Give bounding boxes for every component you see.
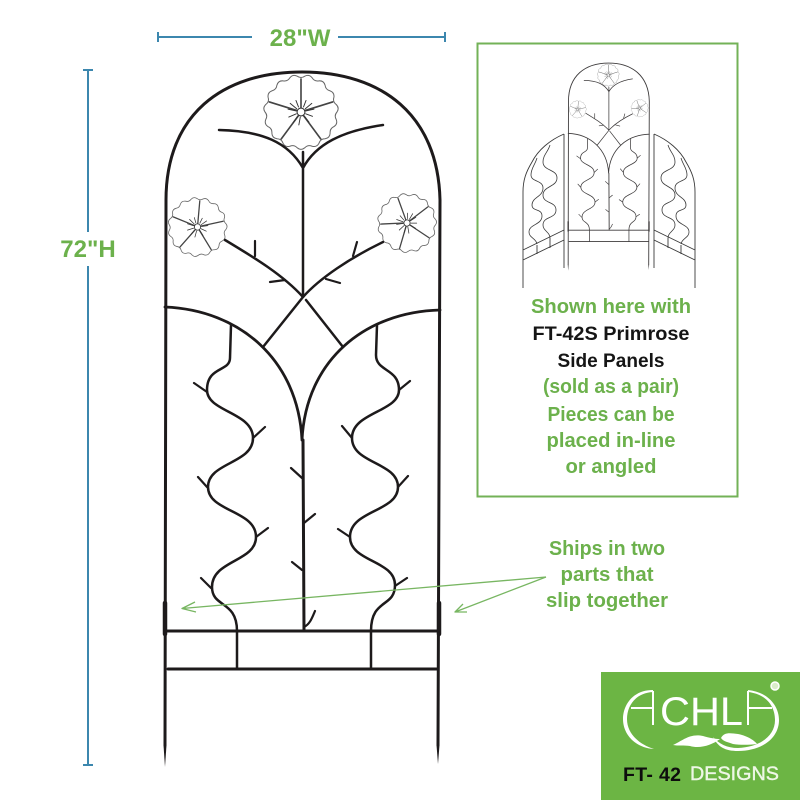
model number: FT- 42: [623, 764, 681, 786]
logo background: [601, 672, 800, 800]
ships in two parts callout: slip together: [546, 590, 668, 612]
height label: 72"H: [60, 236, 116, 263]
inset caption: Side Panels: [558, 351, 664, 372]
logo block: [601, 672, 800, 800]
ships in two parts callout: parts that: [560, 564, 654, 586]
inset trellis with side panels: [523, 61, 695, 288]
inset caption: (sold as a pair): [543, 376, 679, 398]
logo wordmark: [623, 682, 779, 751]
designs label: DESIGNS: [690, 763, 779, 785]
trellis illustration: [157, 65, 454, 767]
inset border: [478, 44, 738, 496]
width label: 28"W: [270, 25, 331, 52]
callout arrows: [182, 577, 546, 612]
inset caption: Shown here with: [531, 296, 691, 318]
ships in two parts callout: Ships in two: [549, 538, 665, 560]
ships in two parts callout: [546, 538, 668, 612]
width dimension arrow: [158, 32, 445, 42]
logo wordmark: CHL: [660, 690, 743, 734]
height dimension arrow: [83, 70, 93, 765]
panel: side panels inset: [478, 44, 738, 496]
inset caption: or angled: [566, 456, 656, 478]
inset caption: FT-42S Primrose: [532, 324, 690, 345]
inset caption: [531, 296, 691, 478]
inset caption: Pieces can be: [548, 404, 674, 426]
inset caption: placed in-line: [546, 430, 676, 452]
